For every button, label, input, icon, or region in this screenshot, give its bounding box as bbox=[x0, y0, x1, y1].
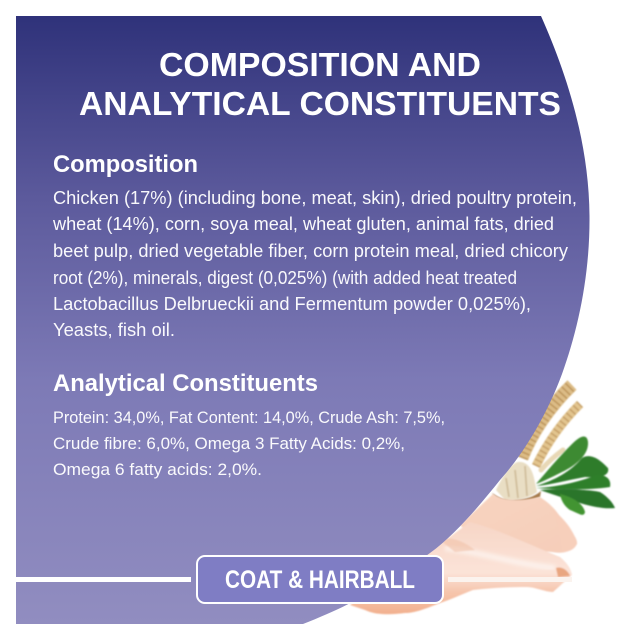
illustration: food ingredients bbox=[350, 385, 615, 614]
spinach leaves bbox=[536, 436, 615, 515]
wheat ears bbox=[522, 385, 580, 470]
title: COMPOSITION AND bbox=[159, 46, 481, 83]
text block: composition list: Chicken (17%) (including bone, meat, skin), dried poultry protein, bbox=[53, 188, 577, 208]
text block: composition list: wheat (14%), corn, soya meal, wheat gluten, animal fats, dried bbox=[52, 214, 554, 234]
heading: composition: Composition bbox=[53, 151, 198, 178]
text block: composition list: beet pulp, dried vegetable fiber, corn protein meal, dried chicory bbox=[53, 241, 568, 261]
text block: analytical values: Omega 6 fatty acids: 2,0%. bbox=[53, 461, 262, 479]
chicken pieces bbox=[350, 494, 577, 614]
divider line left bbox=[16, 577, 191, 582]
text block: analytical values: Protein: 34,0%, Fat Content: 14,0%, Crude Ash: 7,5%, bbox=[53, 409, 445, 427]
text block: composition list bbox=[52, 188, 577, 340]
parsnip root bbox=[492, 462, 541, 502]
text block: composition list: root (2%), minerals, digest (0,025%) (with added heat treated bbox=[53, 268, 517, 288]
badge: coat and hairball bbox=[197, 556, 443, 603]
heading: analytical constituents: Analytical Constituents bbox=[53, 370, 318, 397]
title bbox=[79, 46, 561, 122]
divider line right bbox=[448, 577, 572, 582]
text block: composition list: Lactobacillus Delbrueckii and Fermentum powder 0,025%), bbox=[53, 294, 531, 314]
title: ANALYTICAL CONSTITUENTS bbox=[79, 85, 561, 122]
badge: coat and hairball: COAT & HAIRBALL bbox=[225, 566, 415, 594]
text block: analytical values bbox=[53, 409, 445, 479]
text block: analytical values: Crude fibre: 6,0%, Omega 3 Fatty Acids: 0,2%, bbox=[53, 435, 405, 453]
text block: composition list: Yeasts, fish oil. bbox=[53, 320, 175, 340]
